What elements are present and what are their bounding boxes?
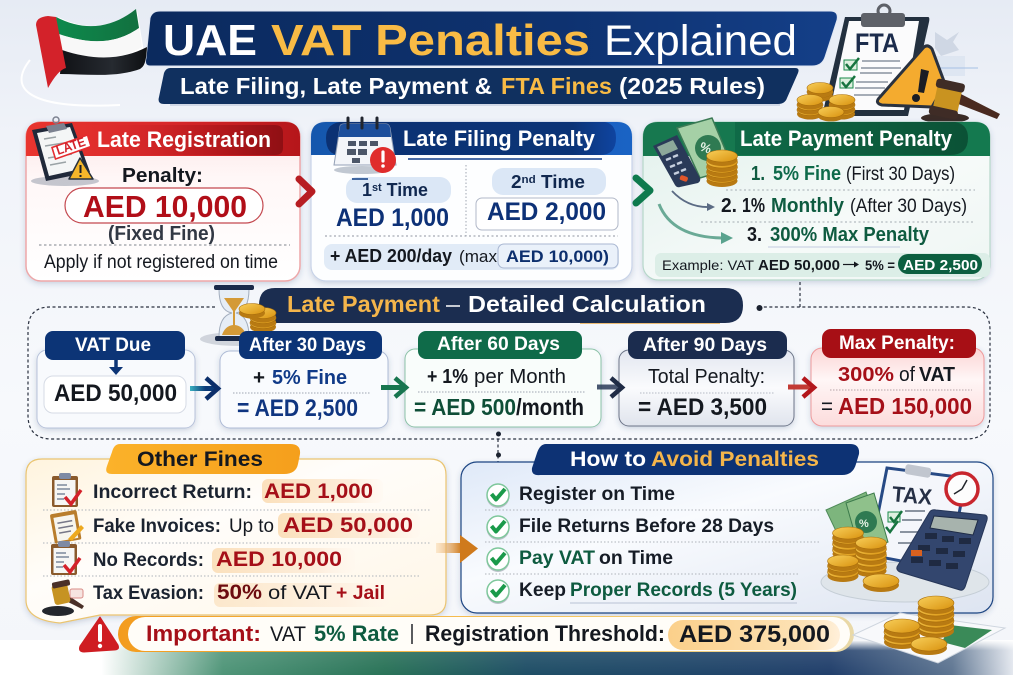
icon: FTA clipboard with warning, gavel and coins: FTA [855, 28, 899, 58]
heading: avoid penalties [532, 444, 859, 475]
icon: warning triangle [80, 617, 118, 652]
important bar: Registration Threshold: [425, 621, 665, 646]
step: max penalty: AED 150,000 [838, 393, 972, 419]
second time: Time [536, 172, 585, 192]
step 2 [721, 195, 967, 217]
subtitle banner [159, 68, 799, 105]
panel: late registration [26, 117, 300, 281]
second time: AED 2,000 [487, 198, 606, 226]
step: after 60 days [405, 331, 601, 427]
step 1 [751, 163, 955, 185]
icon: coins on money [853, 596, 1005, 663]
row: tax evasion: 50% [217, 581, 262, 604]
second time: 2 [511, 172, 521, 192]
title banner: UAE [163, 16, 257, 65]
step: after 30 days: 5% Fine [272, 367, 347, 389]
example bar: AED 2,500 [903, 258, 978, 274]
example bar: 5% = [865, 257, 895, 273]
step header [822, 329, 976, 358]
step: VAT due [37, 331, 195, 428]
daily surcharge: + AED 200/day [330, 246, 452, 266]
panel: late registration: Penalty: [122, 165, 203, 187]
step: after 60 days: per Month [474, 366, 566, 388]
card header [643, 122, 990, 156]
arrow: step 4 [788, 378, 814, 397]
row: tax evasion: Tax Evasion: [93, 583, 204, 604]
daily surcharge: AED 10,000) [506, 247, 609, 266]
section heading: detailed calculation: Detailed Calculation [468, 291, 706, 317]
step: after 60 days: + 1% [427, 366, 468, 388]
step 2: (After 30 Days) [850, 196, 967, 217]
subtitle banner: (2025 Rules) [619, 73, 765, 99]
panel: late payment [643, 118, 990, 280]
row: tax evasion: + Jail [336, 583, 385, 604]
panel: late filing [311, 118, 632, 281]
step header [239, 331, 382, 359]
arrow: step 3 [597, 378, 622, 397]
example bar: Example: VAT [662, 257, 754, 273]
step: max penalty: of [899, 364, 915, 386]
row: fake invoices: Up to [229, 516, 274, 537]
first time: st [372, 182, 382, 194]
step header: After 60 Days [437, 334, 560, 355]
row: keep records [486, 580, 797, 604]
icon: calculator, money and coins: % [698, 139, 714, 157]
section frame: dashed connector [28, 281, 990, 462]
row: fake invoices: AED 50,000 [283, 514, 413, 537]
panel: late registration: Apply if not registered on time [44, 252, 278, 273]
section heading: detailed calculation [259, 288, 743, 324]
row: no records: No Records: [93, 550, 204, 571]
arrow: curve to step 2 [672, 191, 715, 211]
arrow: step 2 [381, 378, 406, 397]
illustration: tax, calculator, money and coins: % [859, 518, 869, 530]
panel: late registration: (Fixed Fine) [108, 223, 215, 245]
row: tax evasion: of VAT [268, 583, 332, 604]
step: max penalty: 300% [838, 364, 894, 386]
daily surcharge: (max [459, 247, 497, 266]
icon: hourglass with coins [200, 285, 280, 346]
important bar: VAT [270, 623, 306, 646]
step 3: 3. [747, 224, 762, 246]
important bar [80, 616, 854, 652]
important bar: AED 375,000 [679, 621, 830, 648]
step 1: 5% Fine [773, 163, 841, 185]
row: keep records: Keep [519, 580, 566, 601]
step header: VAT Due [75, 335, 151, 356]
arrow: green chevron [636, 178, 650, 203]
step header: Max Penalty: [839, 333, 955, 354]
title banner: Explained [604, 17, 797, 65]
icon: late clipboard: LATE [54, 134, 88, 158]
step 1: 1. [751, 163, 765, 185]
card header: Late Registration [97, 127, 271, 152]
panel: other fines [26, 444, 446, 623]
row: incorrect return: Incorrect Return: [93, 482, 252, 503]
arrow: step 1 [190, 378, 218, 399]
icon: calendar with alert [334, 118, 396, 174]
title banner: VAT Penalties [271, 16, 590, 65]
step 2: 1% [742, 195, 765, 217]
step 2: 2. [721, 195, 737, 217]
step 3: 300% Max Penalty [770, 224, 930, 246]
icon: FTA clipboard with warning, gavel and coins [797, 5, 1000, 123]
first time [336, 177, 451, 232]
subtitle banner: Late Filing, Late Payment & [180, 73, 492, 99]
step: after 30 days [220, 331, 388, 428]
row: incorrect return: AED 1,000 [264, 480, 373, 503]
arrow: red chevron [299, 179, 312, 204]
row: no records [51, 541, 355, 575]
row: keep records: Proper Records (5 Years) [570, 580, 797, 601]
row: no records: AED 10,000 [216, 548, 342, 571]
step 1: (First 30 Days) [846, 164, 955, 185]
step: after 90 days: Total Penalty: [648, 366, 765, 388]
step: max penalty: = [821, 393, 833, 419]
section heading: detailed calculation: Late Payment [287, 291, 440, 317]
step header: After 30 Days [249, 335, 366, 356]
step: max penalty [811, 329, 984, 426]
arrow: curve to step 3 [659, 204, 733, 244]
panel: how to avoid penalties [461, 444, 993, 613]
row: fake invoices: Fake Invoices: [93, 516, 221, 537]
heading: avoid penalties: Avoid Penalties [651, 448, 819, 471]
step 2: Monthly [771, 195, 845, 217]
row: incorrect return [52, 473, 383, 507]
row: file returns: File Returns Before 28 Days [519, 516, 774, 537]
step: after 90 days: = AED 3,500 [638, 394, 767, 421]
title banner [146, 11, 837, 66]
daily surcharge [324, 244, 619, 270]
first time: Time [382, 180, 428, 200]
first time: 1 [362, 180, 372, 200]
card header: Late Filing Penalty [403, 126, 596, 151]
step header [418, 331, 582, 359]
icon: calculator, money and coins [653, 118, 738, 187]
row: pay VAT [486, 548, 673, 572]
icon: UAE flag [36, 9, 147, 88]
second time: nd [522, 174, 536, 186]
important bar: 5% Rate [314, 621, 399, 646]
heading: other fines: Other Fines [137, 448, 263, 471]
heading: avoid penalties: How to [570, 448, 646, 471]
row: pay VAT: Pay VAT [519, 548, 595, 569]
example bar [655, 253, 990, 277]
row: fake invoices [50, 510, 420, 544]
illustration: tax, calculator, money and coins [821, 464, 989, 602]
step header [628, 331, 787, 359]
step: after 60 days: /month [516, 394, 584, 420]
illustration: tax, calculator, money and coins: TAX [891, 481, 933, 510]
step header [45, 331, 185, 360]
row: tax evasion [42, 579, 389, 616]
step: after 30 days: = AED 2,500 [237, 395, 358, 422]
arrow: other fines to avoid penalties [436, 535, 478, 563]
step: max penalty: VAT [919, 364, 955, 386]
second time [476, 168, 618, 230]
icon: late clipboard [31, 117, 99, 186]
fine pill: AED 10,000 [83, 189, 247, 224]
example bar: AED 50,000 [758, 258, 840, 274]
step header: After 90 Days [643, 335, 767, 356]
row: pay VAT: on Time [599, 548, 673, 569]
step: after 30 days: + [253, 367, 265, 389]
step: after 60 days: = AED 500 [414, 394, 516, 420]
step: after 90 days [619, 331, 794, 426]
row: register: Register on Time [519, 484, 675, 505]
first time: AED 1,000 [336, 204, 449, 232]
heading: other fines [106, 444, 300, 474]
subtitle banner: FTA Fines [501, 73, 612, 99]
important bar: Important: [146, 621, 261, 646]
step: VAT due: AED 50,000 [54, 380, 177, 407]
card header [311, 122, 632, 159]
card header [26, 122, 300, 156]
card header: Late Payment Penalty [740, 126, 953, 151]
